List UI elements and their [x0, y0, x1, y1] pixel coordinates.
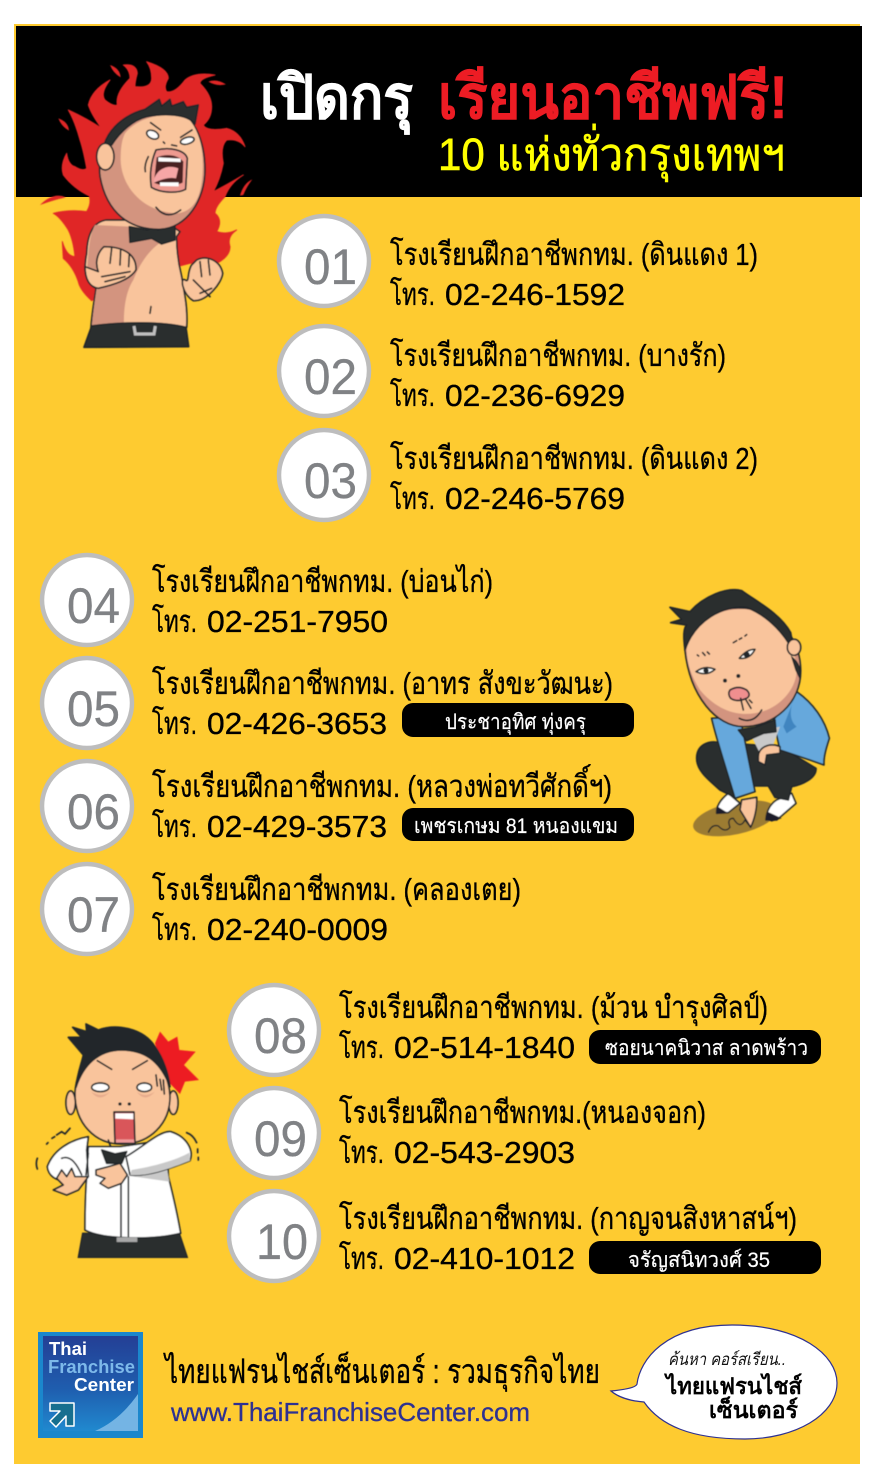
number badge 02: 02 [304, 349, 357, 405]
school row 06 [42, 761, 634, 851]
flames [53, 62, 245, 301]
right hand [96, 1163, 127, 1188]
school name 07: โรงเรียนฝึกอาชีพกทม. (คลองเตย) [152, 872, 521, 907]
pointing finger [740, 797, 757, 827]
address pill 05 [402, 703, 634, 737]
illustration: squatting man in blue jacket [670, 590, 829, 843]
bubble name line 2: เซ็นเตอร์ [709, 1395, 799, 1423]
logo frame [38, 1332, 143, 1438]
logo wordmark: Franchise [48, 1357, 135, 1377]
eyes [145, 128, 160, 141]
phone 02: โทร. [390, 378, 435, 413]
number badge 01: 01 [304, 239, 357, 295]
number badge 06: 06 [67, 784, 120, 840]
phone 03: 02-246-5769 [445, 481, 625, 516]
address pill 05: ประชาอุทิศ ทุ่งครุ [445, 711, 586, 735]
hair [104, 99, 198, 145]
brows and stress lines [97, 1061, 164, 1094]
number badge 10 [229, 1191, 319, 1281]
number badge 08 [229, 985, 319, 1075]
shirt [750, 727, 780, 753]
number badge 04: 04 [67, 578, 120, 634]
logo wordmark: Center [74, 1375, 134, 1395]
phone 09: โทร. [339, 1135, 384, 1170]
jacket right side [773, 692, 829, 765]
address pill 08 [589, 1030, 821, 1064]
phone 03: โทร. [390, 481, 435, 516]
number badge 09 [229, 1088, 319, 1178]
address pill 08: ซอยนาคนิวาส ลาดพร้าว [605, 1037, 808, 1060]
mouth [151, 149, 187, 192]
phone 06: 02-429-3573 [207, 809, 387, 844]
red burst [155, 1032, 199, 1094]
number badge 07: 07 [67, 887, 120, 943]
number badge 03: 03 [304, 453, 357, 509]
bow tie [738, 720, 776, 741]
brows and nose [151, 123, 192, 146]
bow tie [129, 225, 175, 244]
school name 03: โรงเรียนฝึกอาชีพกทม. (ดินแดง 2) [390, 441, 758, 476]
phone 05: โทร. [152, 706, 197, 741]
school row 09 [229, 1088, 706, 1178]
head [685, 608, 801, 727]
cheek shade [91, 1092, 155, 1097]
hair back [792, 657, 800, 678]
school name 04: โรงเรียนฝึกอาชีพกทม. (บ่อนไก่) [152, 564, 493, 599]
torso [85, 220, 187, 327]
lips [729, 687, 749, 700]
school row 04 [42, 555, 493, 645]
logo inner [43, 1336, 138, 1431]
right sleeve [126, 1132, 191, 1175]
footer heading: ไทยแฟรนไชส์เซ็นเตอร์ : รวมธุรกิจไทย [163, 1351, 600, 1392]
hair [670, 590, 794, 653]
subheading: yellow: 10 แห่งทั่วกรุงเทพฯ [438, 123, 785, 182]
bubble name line 1: ไทยแฟรนไชส์ [663, 1372, 803, 1399]
school name 09: โรงเรียนฝึกอาชีพกทม.(หนองจอก) [339, 1095, 706, 1130]
left shoe [717, 793, 740, 813]
school row 07 [42, 864, 521, 954]
navel [147, 307, 153, 313]
number badge 05: 05 [67, 681, 120, 737]
shirt [85, 1140, 181, 1238]
ear [97, 143, 114, 170]
phone 05: 02-426-3653 [207, 706, 387, 741]
address pill 06 [402, 808, 634, 841]
head [75, 1048, 170, 1144]
trousers [78, 1233, 187, 1257]
school row 03 [279, 430, 758, 520]
torso shade [87, 225, 170, 327]
teeth [158, 157, 181, 186]
address pill 10: จรัญสนิทวงศ์ 35 [628, 1248, 770, 1272]
number badge 08: 08 [254, 1008, 307, 1064]
school row 08 [229, 985, 821, 1075]
school row 05 [42, 658, 634, 748]
logo: Thai Franchise Center [38, 1332, 143, 1438]
phone 08: 02-514-1840 [394, 1030, 575, 1065]
pants and belt [84, 323, 189, 347]
left fist [85, 247, 136, 288]
number badge 03 [279, 430, 369, 520]
school row 01 [279, 216, 758, 312]
phone 10: 02-410-1012 [394, 1241, 575, 1276]
number badge 05 [42, 658, 132, 748]
phone 07: โทร. [152, 912, 197, 947]
number badge 06 [42, 761, 132, 851]
belt buckle [117, 1237, 137, 1242]
school name 02: โรงเรียนฝึกอาชีพกทม. (บางรัก) [390, 338, 726, 373]
phone 06: โทร. [152, 809, 197, 844]
hair [68, 1024, 170, 1087]
head [100, 108, 205, 229]
address pill 10 [589, 1241, 821, 1274]
heading: white words: เปิดกรุ [260, 64, 413, 135]
phone 10: โทร. [339, 1241, 384, 1276]
phone 09: 02-543-2903 [394, 1135, 575, 1170]
bubble caption: ค้นหา คอร์สเรียน.. [668, 1350, 786, 1369]
school name 08: โรงเรียนฝึกอาชีพกทม. (ม้วน บำรุงศิลป์) [339, 990, 768, 1027]
speech bubble [611, 1325, 837, 1439]
heading: red words: เรียนอาชีพฟรี! [438, 64, 788, 131]
number badge 07 [42, 864, 132, 954]
chin [739, 710, 762, 720]
ears [66, 1091, 75, 1114]
shirt shade [130, 1167, 169, 1182]
open mouth [114, 1112, 135, 1143]
phone 01: 02-246-1592 [445, 277, 625, 312]
address pill 06: เพชรเกษม 81 หนองแขม [414, 815, 618, 838]
school row 10 [229, 1191, 821, 1281]
chin smile [156, 207, 181, 215]
belt buckle [134, 326, 155, 334]
left hand [53, 1168, 88, 1195]
motion marks [36, 1128, 198, 1169]
left sleeve [47, 1137, 88, 1182]
panel: black header band [16, 26, 862, 197]
school name 01: โรงเรียนฝึกอาชีพกทม. (ดินแดง 1) [390, 237, 758, 272]
squiggle [708, 818, 751, 833]
bubble shape [611, 1325, 837, 1439]
phone 02: 02-236-6929 [445, 378, 625, 413]
school name 05: โรงเรียนฝึกอาชีพกทม. (อาทร สังขะวัฒนะ) [152, 666, 613, 701]
illustration: startled man in white shirt [36, 1024, 199, 1257]
logo wing [95, 1394, 138, 1431]
illustration: angry man with flames [40, 62, 252, 347]
logo arrow [50, 1403, 74, 1427]
eyes [696, 668, 715, 674]
number badge 10: 10 [256, 1214, 308, 1270]
school row 02 [279, 326, 726, 416]
trousers [697, 742, 816, 800]
number badge 04 [42, 555, 132, 645]
ear [787, 639, 801, 655]
jacket left panel [712, 717, 755, 798]
brows and nose [697, 635, 747, 656]
number badge 09: 09 [254, 1111, 307, 1167]
phone 01: โทร. [390, 277, 435, 312]
right shoe [766, 793, 796, 820]
tongue [154, 167, 178, 183]
eyes [92, 1083, 109, 1092]
phone 04: 02-251-7950 [207, 604, 388, 639]
school name 06: โรงเรียนฝึกอาชีพกทม. (หลวงพ่อทวีศักดิ์ฯ) [152, 763, 612, 804]
hand on knee [758, 745, 780, 765]
number badge 02 [279, 326, 369, 416]
phone 08: โทร. [339, 1030, 384, 1065]
face light [687, 609, 797, 714]
logo wordmark: Thai [49, 1339, 87, 1359]
ground shadow [690, 794, 780, 843]
bow tie [102, 1150, 127, 1163]
face light [121, 115, 203, 213]
number badge 01 [279, 216, 369, 306]
logo wordmark [48, 1339, 135, 1395]
footer website: www.ThaiFranchiseCenter.com [170, 1397, 530, 1427]
right fist [182, 258, 223, 301]
phone 07: 02-240-0009 [207, 912, 388, 947]
title [260, 64, 788, 182]
phone 04: โทร. [152, 604, 197, 639]
